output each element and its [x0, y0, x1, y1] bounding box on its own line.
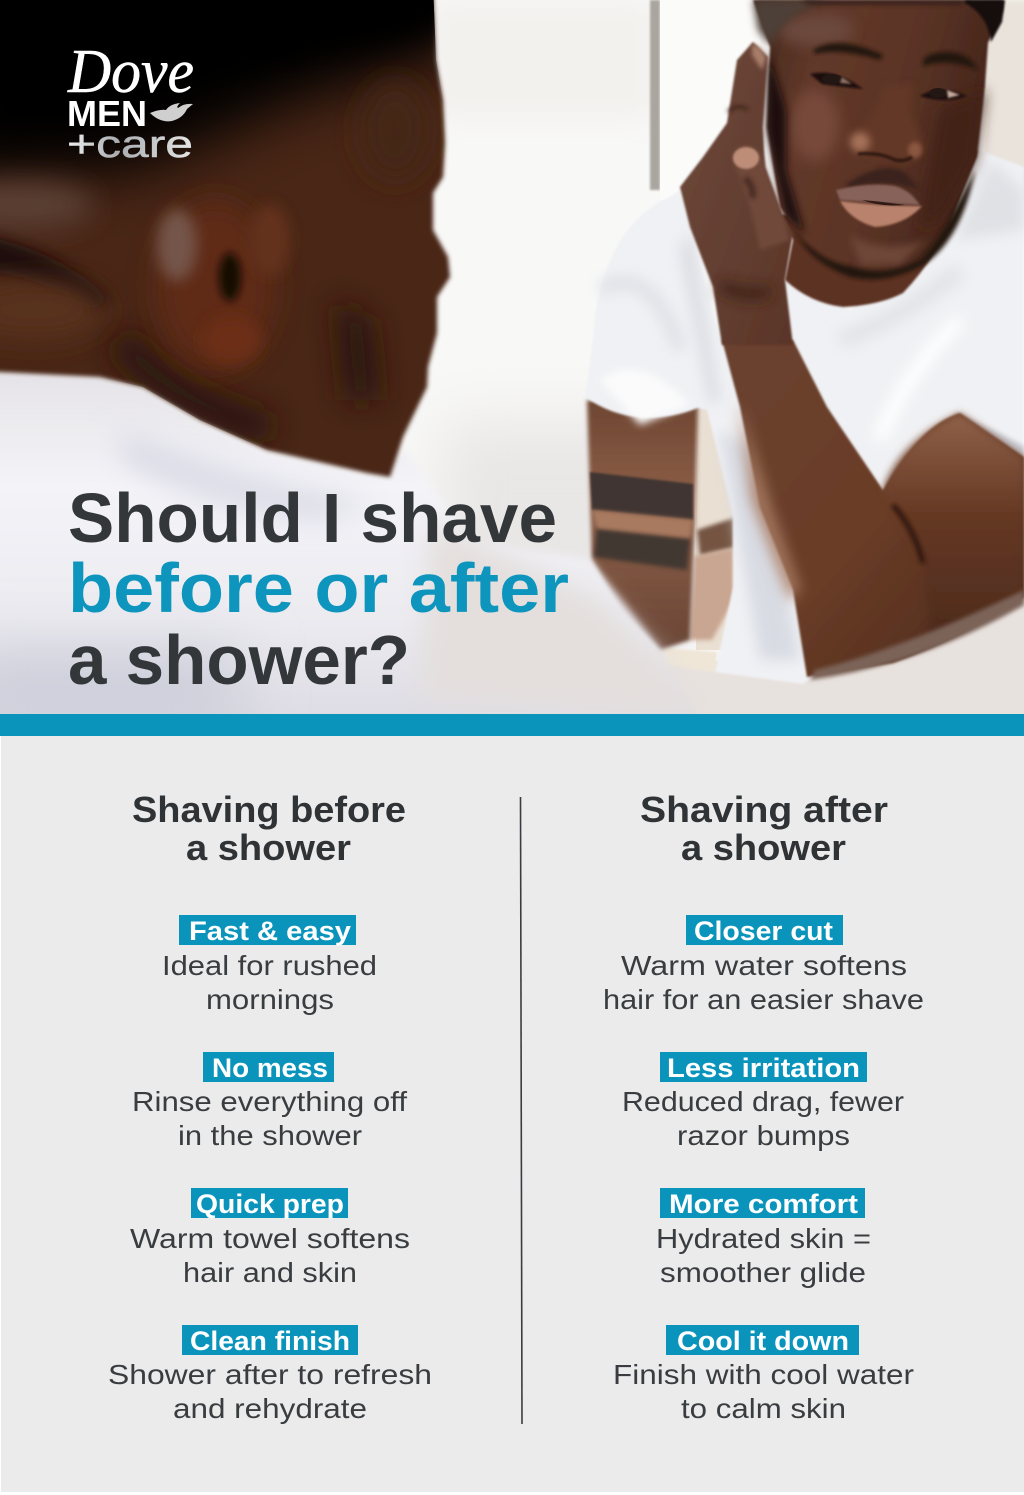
reflected man's neck and head [753, 0, 1005, 307]
item: no mess: in the shower [178, 1120, 362, 1151]
interior tones clipped to the head [0, 0, 460, 430]
title [68, 479, 569, 699]
item: clean finish: Shower after to refresh [108, 1359, 432, 1390]
hero photo: man looking in a mirror [0, 0, 1024, 760]
eyes [810, 73, 967, 100]
reflected man's near arm [722, 340, 1024, 680]
heading: shaving after: Shaving after [640, 789, 888, 830]
item: no mess: Rinse everything off [132, 1086, 407, 1117]
wordmark: +care: +care [67, 124, 193, 166]
item: fast and easy: mornings [206, 984, 334, 1015]
jaw shadow [335, 300, 380, 400]
item: no mess [132, 1052, 407, 1151]
title: Should I shave [68, 479, 557, 557]
item: clean finish [108, 1325, 432, 1424]
item: more comfort [656, 1188, 871, 1288]
upper arm [883, 413, 1024, 640]
item: quick prep: Quick prep [196, 1189, 344, 1219]
item: cool it down: Finish with cool water [613, 1359, 914, 1390]
item: less irritation [622, 1052, 904, 1151]
area below the mirror [655, 597, 1024, 714]
hair darkness across the top [0, 0, 460, 180]
column: shaving after a shower [603, 789, 924, 1424]
item: closer cut [603, 915, 924, 1015]
item: more comfort: More comfort [669, 1189, 858, 1219]
fingers crease [728, 106, 748, 112]
reflected man's far arm [587, 400, 698, 650]
heading: shaving before: Shaving before [132, 789, 406, 830]
icon: dove bird [150, 103, 193, 121]
heading: shaving after: a shower [681, 827, 846, 868]
wordmark: MEN: MEN [67, 93, 147, 134]
neck and left tones [0, 181, 95, 229]
ear [155, 200, 275, 370]
title: before or after [68, 549, 569, 627]
item: cool it down: Cool it down [677, 1326, 849, 1356]
forehead highlight and side shadow [777, 14, 853, 46]
eyebrows [813, 43, 883, 60]
item: more comfort: smoother glide [660, 1257, 866, 1288]
hairline [753, 0, 830, 45]
item: no mess: No mess [212, 1053, 328, 1083]
item: closer cut: Closer cut [694, 916, 833, 946]
content panel [1, 736, 1024, 1492]
mustache and lips [845, 168, 920, 190]
item: closer cut: hair for an easier shave [603, 984, 924, 1015]
center vertical divider [520, 797, 522, 1424]
item: fast and easy [162, 915, 377, 1015]
reflected man's hand [680, 42, 793, 345]
item: closer cut: Warm water softens [621, 950, 907, 981]
title: a shower? [68, 621, 410, 699]
shirt folds [600, 369, 690, 425]
heading: shaving before [132, 789, 406, 868]
thumb [738, 156, 790, 248]
item: less irritation: Less irritation [667, 1053, 860, 1083]
item: clean finish: and rehydrate [173, 1393, 367, 1424]
item: quick prep: Warm towel softens [130, 1223, 410, 1254]
item: less irritation: razor bumps [677, 1120, 850, 1151]
item: fast and easy: Fast & easy [189, 916, 351, 946]
item: quick prep [130, 1188, 410, 1288]
item: clean finish: Clean finish [190, 1326, 350, 1356]
item: less irritation: Reduced drag, fewer [622, 1086, 904, 1117]
item: cool it down: to calm skin [681, 1393, 846, 1424]
brand logo [67, 38, 194, 166]
wordmark: Dove: Dove [67, 38, 194, 106]
heading: shaving after [640, 789, 888, 868]
beard [795, 170, 975, 279]
blue divider bar [0, 714, 1024, 736]
nose [850, 85, 922, 162]
heading: shaving before: a shower [186, 827, 351, 868]
column: shaving before a shower [108, 789, 432, 1424]
blurred back of head in the foreground [0, 0, 460, 477]
item: fast and easy: Ideal for rushed [162, 950, 377, 981]
item: cool it down [613, 1325, 914, 1424]
reflected man's t-shirt [585, 150, 1024, 684]
item: quick prep: hair and skin [183, 1257, 357, 1288]
blurred shoulder of man in the foreground [0, 372, 672, 714]
item: more comfort: Hydrated skin = [656, 1223, 871, 1254]
